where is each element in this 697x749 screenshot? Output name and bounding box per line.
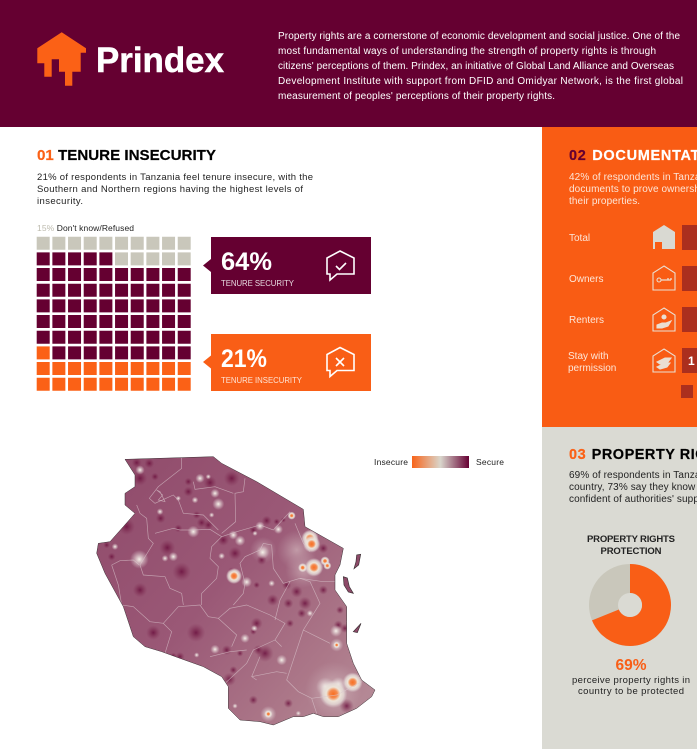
intro text: most fundamental ways of understanding the strength of property rights is through: [278, 46, 656, 57]
panel 03: property rights: [542, 427, 697, 749]
icon: Prindex house logo: [37, 32, 86, 86]
map legend: Insecure: [374, 457, 408, 467]
legend swatch: [681, 385, 693, 398]
donut chart title: PROTECTION: [600, 546, 662, 557]
panel 03 text: [569, 470, 697, 505]
waffle chart: [37, 243, 191, 384]
icon: house with key: [653, 266, 675, 290]
row: total: [569, 225, 697, 250]
logo wordmark: Prindex: [96, 41, 225, 80]
callout: tenure security: [203, 237, 371, 294]
section 01 heading: 01 TENURE INSECURITY: [37, 147, 216, 164]
waffle legend: 15% Don't know/Refused: [37, 223, 134, 233]
donut stat: [572, 657, 690, 697]
section 01 text: 21% of respondents in Tanzania feel tenure insecure, with the: [37, 172, 313, 183]
map legend: Secure: [476, 457, 504, 467]
row: stay with permission: 1: [688, 354, 695, 368]
row: stay with permission: [568, 348, 697, 374]
intro text: Property rights are a cornerstone of economic development and social justice. One of the: [278, 31, 680, 42]
heat map of Tanzania: [90, 450, 380, 735]
panel 02 text: [569, 172, 697, 207]
map legend: [374, 456, 504, 468]
icon: speech bubble house with check: [327, 251, 354, 280]
row: renters: Renters: [569, 315, 604, 326]
icon: house: [653, 225, 675, 249]
callout: tenure security: 64%: [221, 248, 272, 276]
islands: [343, 554, 361, 633]
panel 02: documentation: [542, 127, 697, 427]
callout: tenure insecurity: 21%: [221, 345, 267, 373]
section 01 text: [37, 172, 313, 207]
section 01 text: insecurity.: [37, 196, 83, 207]
row: owners: [569, 266, 697, 291]
icon: speech bubble house with cross: [327, 348, 354, 376]
row: stay with permission: permission: [568, 363, 616, 374]
section 01 text: Southern and Northern regions having the highest levels of: [37, 184, 303, 195]
header band: [0, 0, 697, 127]
callout: tenure insecurity: [203, 334, 371, 391]
donut chart: [589, 564, 671, 646]
icon: house with hand and person: [653, 308, 675, 331]
donut chart title: PROPERTY RIGHTS: [587, 534, 675, 545]
row: renters: [569, 307, 697, 332]
row: total: Total: [569, 233, 590, 244]
donut stat: country to be protected: [578, 686, 684, 697]
donut stat: 69%: [616, 657, 646, 674]
donut stat: perceive property rights in: [572, 675, 690, 686]
intro text: [278, 31, 683, 102]
intro text: citizens' perceptions of them. Prindex, an initiative of Global Land Alliance and Overseas: [278, 61, 674, 72]
callout: tenure security: TENURE SECURITY: [221, 279, 295, 288]
intro text: measurement of peoples' perceptions of their property rights.: [278, 91, 555, 102]
callout: tenure insecurity: TENURE INSECURITY: [221, 376, 303, 385]
donut chart title: [587, 534, 675, 557]
panel 02 text: their properties.: [569, 196, 640, 207]
intro text: Development Institute with support from DFID and Omidyar Network, is the first global: [278, 76, 683, 87]
row: stay with permission: Stay with: [568, 351, 609, 362]
row: owners: Owners: [569, 274, 603, 285]
icon: house with shaking hands: [653, 349, 675, 372]
